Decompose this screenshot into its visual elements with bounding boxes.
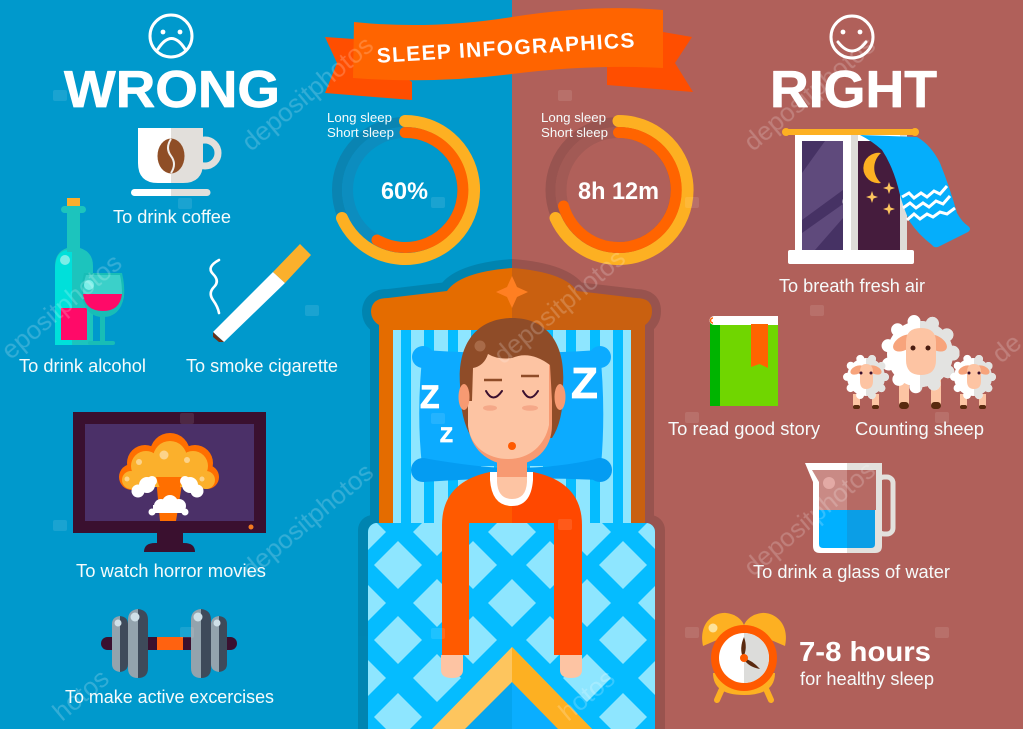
heading: right: RIGHT (770, 61, 937, 119)
label: exercises: To make active excercises (65, 687, 274, 707)
man body (441, 455, 582, 678)
watermarks: depositphotos (738, 30, 881, 157)
panel: wrong background (0, 0, 512, 729)
callout: healthy sleep hours: 7-8 hours (799, 636, 931, 667)
watermarks: depositphotos (488, 243, 631, 370)
icon: sad face (150, 15, 192, 57)
icon: sheep (847, 321, 992, 409)
label: coffee: To drink coffee (113, 207, 231, 227)
letters: snoring z: Z (571, 359, 598, 408)
watermarks: depositphotos (236, 30, 379, 157)
icon: book (710, 316, 778, 406)
watermarks: depositphotos (236, 457, 379, 584)
icon: wine bottle and glass (55, 198, 124, 345)
striped backdrop (393, 330, 631, 525)
legend: left donut: Long sleep (327, 110, 392, 125)
blanket (368, 523, 655, 729)
big sheep (887, 321, 953, 409)
label: counting sheep: Counting sheep (855, 419, 984, 439)
donut chart: 60% (337, 121, 474, 259)
icon: dumbbell (101, 609, 237, 678)
icon: cigarette (211, 244, 311, 342)
watermarks: hotos (553, 663, 621, 727)
icon: tv with explosion (73, 412, 266, 552)
watermark camera marks (53, 90, 949, 639)
icon: smiling face (831, 16, 873, 58)
heading: wrong: WRONG (64, 61, 280, 119)
label: fresh air: To breath fresh air (779, 276, 925, 296)
callout: healthy sleep hours (799, 636, 934, 689)
letters: snoring z: Z (420, 379, 440, 415)
pillow (411, 346, 612, 482)
title ribbon: SLEEP INFOGRAPHICS (376, 29, 635, 68)
donut chart: 60%: 60% (381, 178, 428, 205)
panel: right background (512, 0, 1023, 729)
watermarks: depositphotos (738, 455, 881, 582)
man head (458, 318, 566, 465)
icon: open window with curtain (782, 128, 970, 264)
legend: right donut: Short sleep (541, 125, 608, 140)
letters: snoring z: Z (440, 424, 453, 447)
headboard (371, 268, 652, 530)
legend: left donut: Short sleep (327, 125, 394, 140)
label: alcohol: To drink alcohol (19, 356, 146, 376)
right lamb (954, 358, 992, 409)
left lamb (847, 358, 885, 409)
legend: right donut (541, 110, 608, 140)
watermarks: hotos (47, 663, 115, 727)
label: glass of water: To drink a glass of water (753, 562, 950, 582)
letters: snoring z (420, 359, 598, 447)
legend: right donut: Long sleep (541, 110, 606, 125)
bed shadow halo (358, 268, 665, 729)
icon: water jug (805, 463, 893, 553)
donut chart: 8h 12m (550, 121, 688, 259)
illustration: sleeping man in bed (358, 259, 665, 729)
label: cigarette: To smoke cigarette (186, 356, 338, 376)
label: good story: To read good story (668, 419, 820, 439)
label: horror movies: To watch horror movies (76, 561, 266, 581)
legend: left donut (327, 110, 394, 140)
icon: alarm clock (702, 613, 786, 700)
callout: healthy sleep hours: for healthy sleep (800, 669, 934, 689)
title ribbon (325, 8, 693, 100)
icon: coffee cup (131, 128, 218, 196)
donut chart: 8h 12m: 8h 12m (578, 178, 659, 205)
